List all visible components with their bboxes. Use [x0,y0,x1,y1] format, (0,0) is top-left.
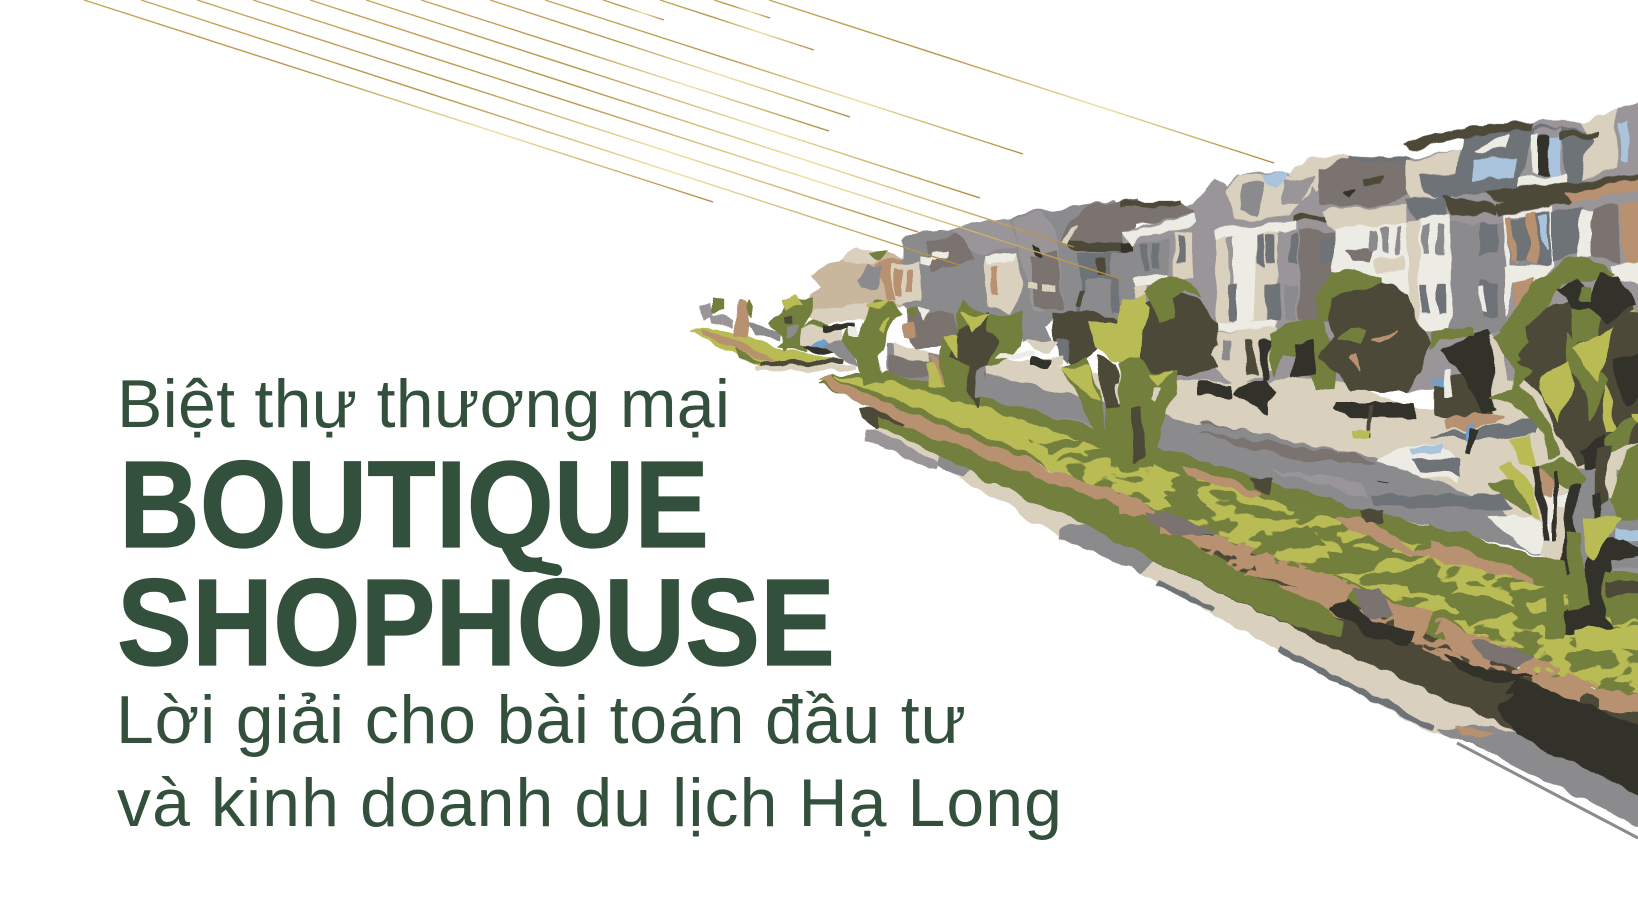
headline: BOUTIQUE: BOUTIQUE [119,437,709,574]
far buildings and hill [803,200,1137,340]
gold diagonal lines [84,0,1274,279]
main trees, car and pedestrian [1120,270,1533,487]
tagline line 1: Lời giải cho bài toán đầu tư [116,682,966,758]
tagline line 2: và kinh doanh du lịch Hạ Long [117,765,1062,841]
title text [116,366,1062,841]
main villas [1120,103,1638,390]
subtitle line: Biệt thự thương mại: Biệt thự thương mại [117,366,730,442]
headline: SHOPHOUSE: SHOPHOUSE [117,555,835,692]
median planting details [1120,467,1638,800]
illustration: street of villas [690,103,1638,830]
street: sidewalk, road, median and kerb [820,345,1638,830]
Q tail of headline [507,545,556,570]
kerb gap and line [1457,741,1638,838]
large tree and palm in foreground [1430,257,1638,650]
far island, trees and shrubs [690,297,1147,467]
